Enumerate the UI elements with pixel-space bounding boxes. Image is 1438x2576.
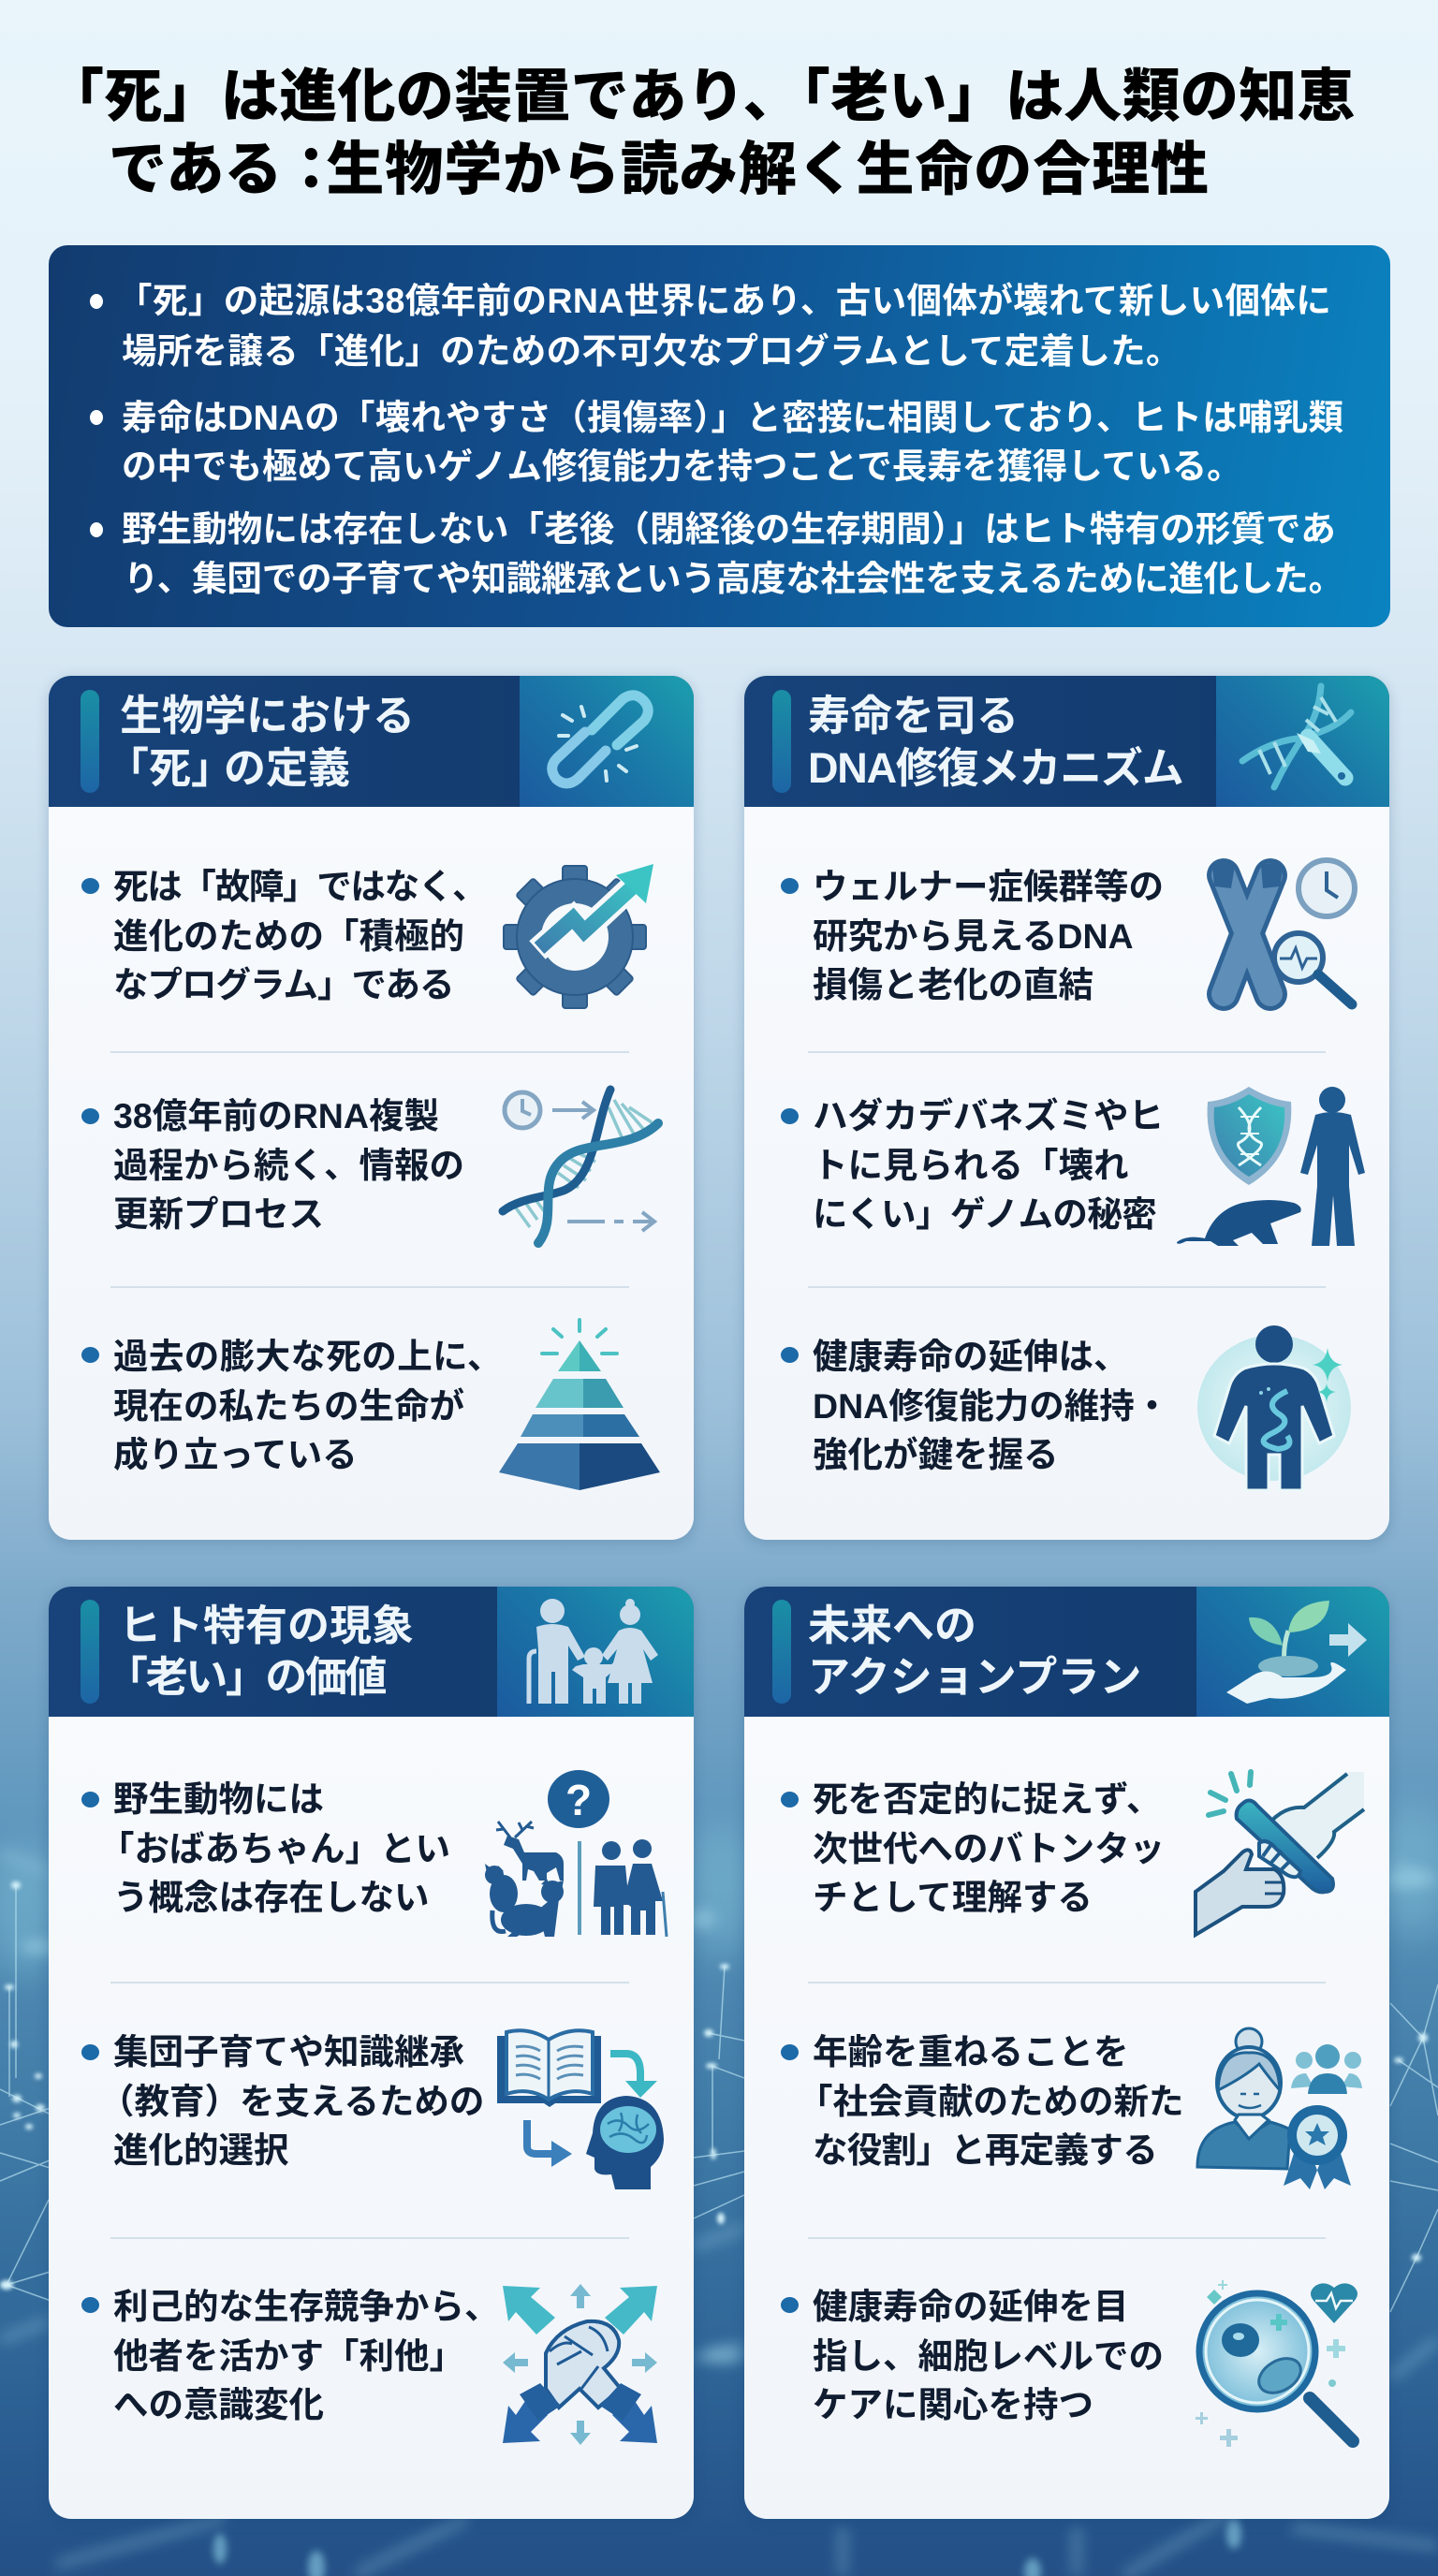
icon: dna and wrench xyxy=(1240,683,1354,790)
panel: summary: の中でも極めて高いゲノム修復能力を持つことで長寿を獲得している。 xyxy=(122,446,1242,486)
panel: summary xyxy=(49,245,1390,627)
text: item 3 xyxy=(81,1347,99,1363)
panel: value of ageing: う概念は存在しない xyxy=(113,1878,429,1917)
text: item 1 xyxy=(781,878,799,894)
panel: DNA repair xyxy=(744,676,1389,1540)
panel: DNA repair: 損傷と老化の直結 xyxy=(813,965,1093,1004)
icon: grandmother with medal xyxy=(1196,2027,1362,2189)
panel: summary: 「死」の起源は38億年前のRNA世界にあり、古い個体が壊れて新しい個体に xyxy=(117,281,1331,320)
icon: broken chain xyxy=(547,690,653,788)
icon: pyramid xyxy=(499,1318,660,1490)
divider xyxy=(110,1051,629,1053)
panel: DNA repair: にくい」ゲノムの秘密 xyxy=(813,1194,1156,1234)
header xyxy=(49,1587,694,1717)
panel: DNA repair: 研究から見えるDNA xyxy=(813,915,1134,955)
text: item 2 xyxy=(781,1108,799,1124)
panel: definition of death: なプログラム」である xyxy=(113,965,453,1004)
panel: definition of death: 38億年前のRNA複製 xyxy=(113,1096,439,1135)
icon: hand with sprout xyxy=(1226,1601,1367,1704)
icon: baton handover xyxy=(1194,1769,1365,1938)
panel: value of ageing xyxy=(49,1587,694,2519)
panel: definition of death: 成り立っている xyxy=(113,1435,358,1474)
divider xyxy=(110,1982,629,1983)
header: 寿命を司る xyxy=(808,692,1019,739)
icon: dna with arrows xyxy=(498,1086,663,1248)
divider xyxy=(808,1286,1326,1288)
panel: value of ageing: （教育）を支えるための xyxy=(99,2082,484,2121)
icon: animals vs elderly: ? xyxy=(565,1776,592,1824)
text: item 3 xyxy=(781,2297,799,2313)
text: item 3 xyxy=(81,2297,99,2313)
panel: DNA repair: ハダカデバネズミやヒ xyxy=(813,1096,1164,1135)
header: ヒト特有の現象 xyxy=(119,1602,414,1649)
divider xyxy=(808,1982,1326,1983)
icon: gear with arrow xyxy=(503,864,653,1009)
panel: DNA repair: 強化が鍵を握る xyxy=(813,1435,1058,1474)
divider xyxy=(110,1286,629,1288)
panel: value of ageing: 進化的選択 xyxy=(113,2130,288,2170)
panel: value of ageing: 利己的な生存競争から、 xyxy=(113,2287,500,2326)
panel: definition of death xyxy=(49,676,694,1540)
header: DNA修復メカニズム xyxy=(808,744,1183,792)
panel: action plan: 死を否定的に捉えず、 xyxy=(813,1779,1161,1819)
panel: action plan: 年齢を重ねることを xyxy=(813,2032,1129,2071)
icon: book to brain xyxy=(497,2028,664,2189)
icon: chromosome, clock, magnifier xyxy=(1207,857,1357,1011)
text: item 3 xyxy=(781,1347,799,1363)
divider xyxy=(808,1051,1326,1053)
panel: definition of death: 現在の私たちの生命が xyxy=(113,1385,464,1425)
panel: DNA repair: トに見られる「壊れ xyxy=(813,1146,1129,1185)
header: 未来への xyxy=(808,1602,976,1649)
icon: shield, human, naked mole rat xyxy=(1177,1087,1365,1246)
text: item 1 xyxy=(781,1792,799,1808)
panel: summary: り、集団での子育てや知識継承という高度な社会性を支えるために進化した。 xyxy=(124,559,1343,598)
header: アクションプラン xyxy=(808,1653,1141,1701)
panel: action plan: ケアに関心を持つ xyxy=(813,2385,1093,2424)
icon: magnifier over cell xyxy=(1196,2280,1359,2448)
icon: body with dna halo xyxy=(1197,1325,1351,1488)
panel: value of ageing: 他者を活かす「利他」 xyxy=(113,2336,464,2376)
panel: DNA repair: ウェルナー症候群等の xyxy=(813,867,1164,906)
title: 「死」は進化の装置であり、「老い」は人類の知恵 xyxy=(46,65,1356,129)
panel: definition of death: 死は「故障」ではなく、 xyxy=(113,867,486,906)
header: 「死」の定義 xyxy=(107,744,350,792)
header: 生物学における xyxy=(120,692,415,739)
panel: action plan: 次世代へのバトンタッ xyxy=(813,1829,1165,1868)
text: item 2 xyxy=(81,1108,99,1124)
panel: value of ageing: への意識変化 xyxy=(113,2385,324,2424)
panel: action plan: チとして理解する xyxy=(813,1878,1093,1917)
icon: animals vs elderly xyxy=(485,1770,668,1938)
panel: DNA repair: 健康寿命の延伸は、 xyxy=(813,1337,1129,1376)
divider xyxy=(808,2237,1326,2239)
panel: action plan: な役割」と再定義する xyxy=(813,2130,1157,2170)
icon: family xyxy=(526,1599,658,1704)
panel: action plan: 指し、細胞レベルでの xyxy=(813,2336,1164,2376)
panel: value of ageing: 野生動物には xyxy=(113,1779,324,1819)
divider xyxy=(110,2237,629,2239)
text: item 1 xyxy=(81,1792,99,1808)
title: である：生物学から読み解く生命の合理性 xyxy=(109,138,1210,202)
panel: definition of death: 進化のための「積極的 xyxy=(113,915,464,955)
panel: DNA repair: DNA修復能力の維持・ xyxy=(813,1385,1169,1425)
header xyxy=(49,676,694,807)
header xyxy=(744,1587,1389,1717)
panel: summary: 場所を譲る「進化」のための不可欠なプログラムとして定着した。 xyxy=(122,331,1181,371)
panel: action plan: 健康寿命の延伸を目 xyxy=(813,2287,1129,2326)
panel: definition of death: 過去の膨大な死の上に、 xyxy=(113,1337,503,1376)
header xyxy=(744,676,1389,807)
panel: summary: 野生動物には存在しない「老後（閉経後の生存期間）」はヒト特有の形質であ xyxy=(122,509,1336,549)
icon: clasped hands with arrows xyxy=(503,2284,657,2445)
panel: definition of death: 過程から続く、情報の xyxy=(113,1146,464,1185)
text: item 1 xyxy=(81,878,99,894)
panel: definition of death: 更新プロセス xyxy=(113,1194,324,1234)
title xyxy=(46,65,1356,202)
panel: value of ageing: 「おばあちゃん」とい xyxy=(99,1829,450,1868)
panel: action plan: 「社会貢献のための新た xyxy=(798,2082,1183,2121)
panel: action plan xyxy=(744,1587,1389,2519)
panel: value of ageing: 集団子育てや知識継承 xyxy=(113,2032,464,2071)
panel: summary: 寿命はDNAの「壊れやすさ（損傷率）」と密接に相関しており、ヒトは哺乳類 xyxy=(122,398,1343,437)
text: item 2 xyxy=(81,2044,99,2060)
header: 「老い」の価値 xyxy=(106,1653,385,1701)
text: item 2 xyxy=(781,2044,799,2060)
